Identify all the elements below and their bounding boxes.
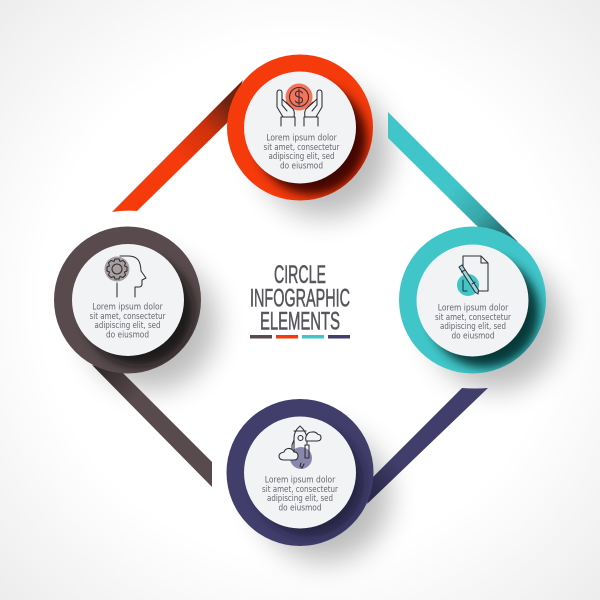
- disc: teal: [416, 244, 528, 356]
- text: brown: adipiscing elit, sed: [94, 321, 160, 331]
- node: brown: [54, 226, 201, 374]
- text: red: Lorem ipsum dolor: [266, 134, 337, 144]
- ring shadow: brown: [84, 256, 194, 366]
- text: brown: Lorem ipsum dolor: [92, 302, 163, 312]
- node: teal: [399, 226, 546, 374]
- ring: brown: [54, 226, 201, 374]
- soft cast shadows on background: [85, 85, 562, 562]
- disc: navy: [244, 416, 356, 528]
- ribbon: navy: [367, 388, 488, 504]
- text: navy: adipiscing elit, sed: [267, 494, 333, 504]
- icon: document and pen: [457, 256, 488, 296]
- icon: rocket and clouds: [279, 426, 321, 469]
- title: [250, 261, 350, 336]
- node: red: [227, 54, 373, 200]
- text: red: adipiscing elit, sed: [268, 152, 334, 162]
- node: navy: [226, 399, 374, 546]
- text: navy: do eiusmod: [278, 504, 322, 514]
- icon: hands holding coin: [277, 84, 322, 126]
- text: navy: [262, 476, 338, 514]
- text: teal: do eiusmod: [452, 332, 494, 342]
- ring shadow: navy: [254, 426, 364, 536]
- ring shadow: red: [257, 84, 367, 194]
- ribbon: teal: [388, 112, 518, 242]
- text: red: do eiusmod: [280, 162, 323, 172]
- text: teal: Lorem ipsum dolor: [438, 304, 509, 314]
- icon: head with gear: [104, 256, 146, 297]
- title: INFOGRAPHIC: [250, 284, 350, 312]
- text: teal: [435, 304, 511, 342]
- ring shadow: teal: [430, 258, 540, 368]
- text: brown: [90, 302, 166, 340]
- text: navy: sit amet, consectetur: [262, 485, 338, 495]
- legend colour bars: [250, 335, 350, 338]
- text: teal: sit amet, consectetur: [435, 313, 511, 323]
- text: red: sit amet, consectetur: [264, 143, 340, 153]
- ring: navy: [226, 399, 374, 546]
- disc: brown: [72, 244, 184, 356]
- text: navy: Lorem ipsum dolor: [265, 476, 336, 486]
- title: ELEMENTS: [260, 308, 340, 336]
- text: teal: adipiscing elit, sed: [440, 322, 506, 332]
- text: brown: sit amet, consectetur: [90, 312, 166, 322]
- text: red: [264, 134, 340, 172]
- ring: teal: [399, 226, 546, 374]
- disc: red: [244, 72, 356, 184]
- ribbon: brown: [92, 365, 212, 487]
- text: brown: do eiusmod: [106, 330, 149, 340]
- title: CIRCLE: [274, 261, 326, 289]
- ring: red: [227, 54, 373, 200]
- ribbon: red: [112, 80, 243, 212]
